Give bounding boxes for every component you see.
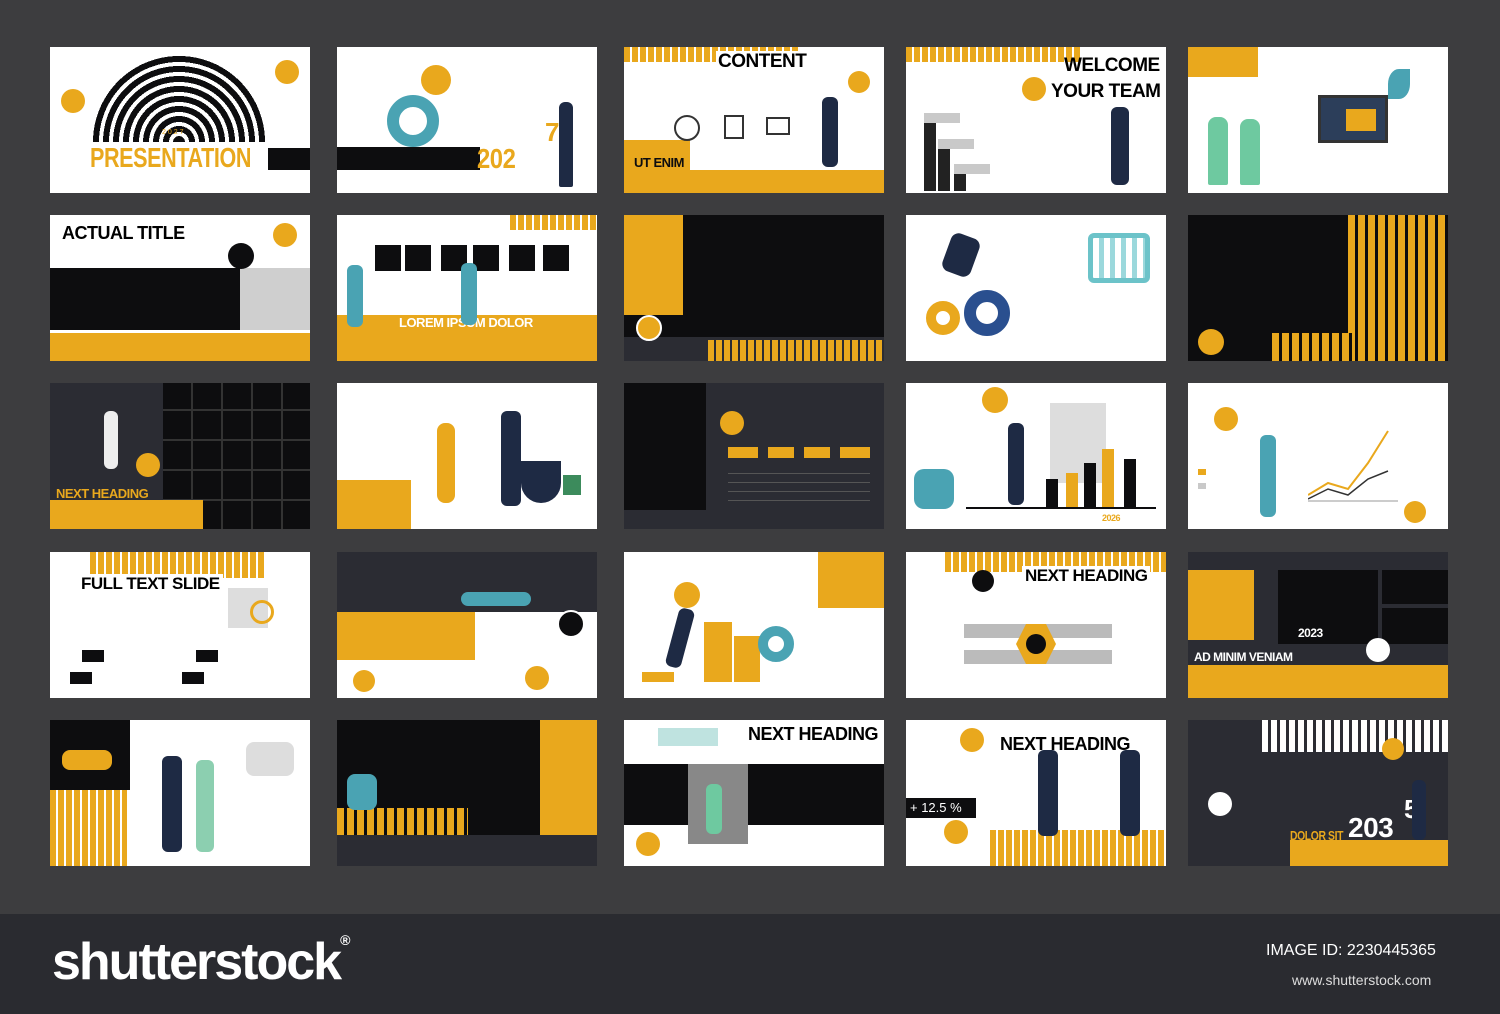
slide 2: 2027 gears: 7	[545, 117, 559, 147]
top stripes	[90, 552, 266, 578]
percentage label	[906, 798, 976, 818]
slide 22: dark image slide	[337, 720, 597, 866]
slide 19: next heading hexagon	[906, 552, 1166, 698]
black bar	[268, 148, 310, 170]
businessman	[501, 411, 521, 506]
percentage label: + 12.5 %	[910, 800, 962, 815]
top stripes	[906, 47, 1080, 62]
yellow woman	[437, 423, 455, 503]
dark top	[337, 552, 597, 612]
slide 8: black image slide	[624, 215, 884, 361]
gray box	[228, 588, 268, 628]
slide 7: lorem ipsum dolor icons	[337, 215, 597, 361]
yellow text box	[818, 552, 884, 608]
stripes	[708, 340, 884, 361]
slide 20: ad minim veniam: 2023	[1298, 626, 1323, 640]
heading: NEXT HEADING	[1025, 566, 1147, 585]
dark bottom band	[337, 835, 597, 866]
slide 6: actual title	[50, 215, 310, 361]
slide 4: welcome your team	[906, 47, 1166, 193]
icon circle	[960, 728, 984, 752]
icon circle	[636, 832, 660, 856]
tabs	[728, 447, 758, 458]
site url: www.shutterstock.com	[1292, 972, 1431, 988]
green figures	[1208, 117, 1228, 185]
bottom stripes	[990, 830, 1166, 866]
yellow band	[50, 500, 203, 529]
people	[1008, 423, 1024, 505]
heading CONTENT: CONTENT	[718, 51, 806, 72]
image id: IMAGE ID: 2230445365	[1266, 942, 1436, 959]
stripes	[50, 790, 127, 866]
calendar	[1088, 233, 1150, 283]
footer bar	[0, 914, 1500, 1014]
woman	[1260, 435, 1276, 517]
person	[104, 411, 118, 469]
slide 11: next heading team grid	[50, 383, 310, 529]
heading: ACTUAL TITLE	[62, 223, 185, 243]
yellow bottom band	[337, 315, 597, 361]
black image area	[624, 383, 706, 510]
icon circles	[1208, 792, 1232, 816]
person	[1412, 780, 1426, 840]
yellow bottom band	[1290, 840, 1448, 866]
rings graphic	[93, 56, 265, 142]
black band	[624, 764, 884, 825]
man	[665, 607, 695, 669]
black grid	[163, 383, 310, 529]
slide 9: gears & calendar	[906, 215, 1166, 361]
slide 14: growth bar chart	[906, 383, 1166, 529]
slide 3: content: UT ENIM	[634, 155, 684, 170]
yellow block	[624, 215, 683, 315]
chart	[1308, 430, 1398, 502]
heading: AD MINIM VENIAM	[1194, 650, 1292, 664]
icon circle	[1198, 329, 1224, 355]
icon circle	[720, 411, 744, 435]
slide 11: next heading team grid: NEXT HEADING	[56, 486, 148, 501]
yellow text box	[1188, 47, 1258, 77]
person	[706, 784, 722, 834]
slide 17: icon band	[337, 552, 597, 698]
person with pencil	[822, 97, 838, 167]
gray box	[688, 764, 748, 844]
icon circle	[1214, 407, 1238, 431]
leaves	[1388, 69, 1410, 99]
logo text: shutterstock®	[52, 932, 348, 991]
white stripes	[1262, 720, 1448, 752]
table lines	[728, 465, 870, 501]
arrow bars	[924, 117, 936, 191]
slide 14: growth bar chart: 2026	[1102, 513, 1120, 523]
gear	[758, 626, 794, 662]
heading: FULL TEXT SLIDE	[81, 574, 220, 593]
black image boxes	[1278, 570, 1378, 644]
people	[162, 756, 182, 852]
slide 7: lorem ipsum dolor icons: LOREM IPSUM DOLOR	[399, 315, 533, 330]
slide 18: coins & gears	[624, 552, 884, 698]
house shape	[1050, 403, 1106, 483]
coin stacks	[642, 672, 674, 682]
icon circles	[557, 610, 585, 638]
icon: yellow circle right	[275, 60, 299, 84]
slide 24: next heading two businessmen	[906, 720, 1166, 866]
axis line	[966, 507, 1156, 509]
running man	[940, 231, 982, 279]
vertical stripes	[1348, 215, 1448, 361]
icon boxes	[375, 245, 401, 271]
number tags	[82, 650, 104, 662]
slide 21: handshake	[50, 720, 310, 866]
gear yellow	[421, 65, 451, 95]
yellow icons box	[1188, 570, 1254, 640]
lying woman	[461, 592, 531, 606]
black bar	[337, 147, 480, 170]
bottom yellow band	[624, 170, 884, 193]
slide 2: 2027 gears	[337, 47, 597, 193]
hexagon	[1016, 624, 1056, 664]
icon: yellow circle left	[61, 89, 85, 113]
person	[1111, 107, 1129, 185]
stripes	[337, 808, 468, 835]
icon circle	[636, 315, 662, 341]
top stripes	[624, 47, 800, 62]
bars	[1046, 479, 1058, 507]
top stripes	[945, 552, 1166, 572]
slide 13: table slide	[624, 383, 884, 529]
yellow bottom band	[1188, 665, 1448, 698]
slide 23: next heading black band	[624, 720, 884, 866]
slide 12: businessman with shield	[337, 383, 597, 529]
heading: NEXT HEADING	[748, 724, 878, 744]
title text PRESENTATION: PRESENTATION	[90, 142, 251, 173]
monitor	[1318, 95, 1388, 143]
heading: WELCOME	[1064, 55, 1160, 76]
legend squares	[1198, 469, 1206, 475]
icon circle	[1366, 638, 1390, 662]
gray text box	[240, 268, 310, 330]
yellow bottom band	[50, 333, 310, 361]
slide 3: content	[624, 47, 884, 193]
slide 5: presentation with monitor	[1188, 47, 1448, 193]
top stripes	[510, 215, 597, 230]
person	[347, 774, 377, 810]
dark bottom	[624, 337, 884, 361]
person figure	[559, 102, 573, 187]
slide 25: 2035 dark	[1188, 720, 1448, 866]
gear teal	[387, 95, 439, 147]
slide 16: full text slide	[50, 552, 310, 698]
icon circle	[982, 387, 1008, 413]
slide 10: black with stripes	[1188, 215, 1448, 361]
slide 25: 2035 dark: 203	[1348, 812, 1393, 843]
yellow text column	[540, 720, 597, 835]
icons row	[674, 115, 700, 141]
yellow band	[337, 612, 475, 660]
people	[347, 265, 363, 327]
slide 15: line chart	[1188, 383, 1448, 529]
slide 20: ad minim veniam	[1188, 552, 1448, 698]
yellow text box	[337, 480, 411, 529]
black box	[50, 720, 130, 790]
slide 25: 2035 dark: DOLOR SIT	[1290, 828, 1343, 843]
gray arrows	[964, 624, 1112, 638]
gear yellow	[926, 301, 960, 335]
shield	[521, 461, 561, 503]
businessmen	[1038, 750, 1058, 836]
gear blue	[964, 290, 1010, 336]
heading: NEXT HEADING	[1000, 734, 1130, 754]
slide 1: presentation cover	[50, 47, 310, 193]
slide 4: welcome your team: YOUR TEAM	[1051, 81, 1160, 102]
black image band	[50, 268, 240, 330]
year label: 2027	[162, 129, 186, 136]
year text: 202	[477, 143, 515, 174]
slide 25: 2035 dark: 5	[1404, 794, 1418, 824]
